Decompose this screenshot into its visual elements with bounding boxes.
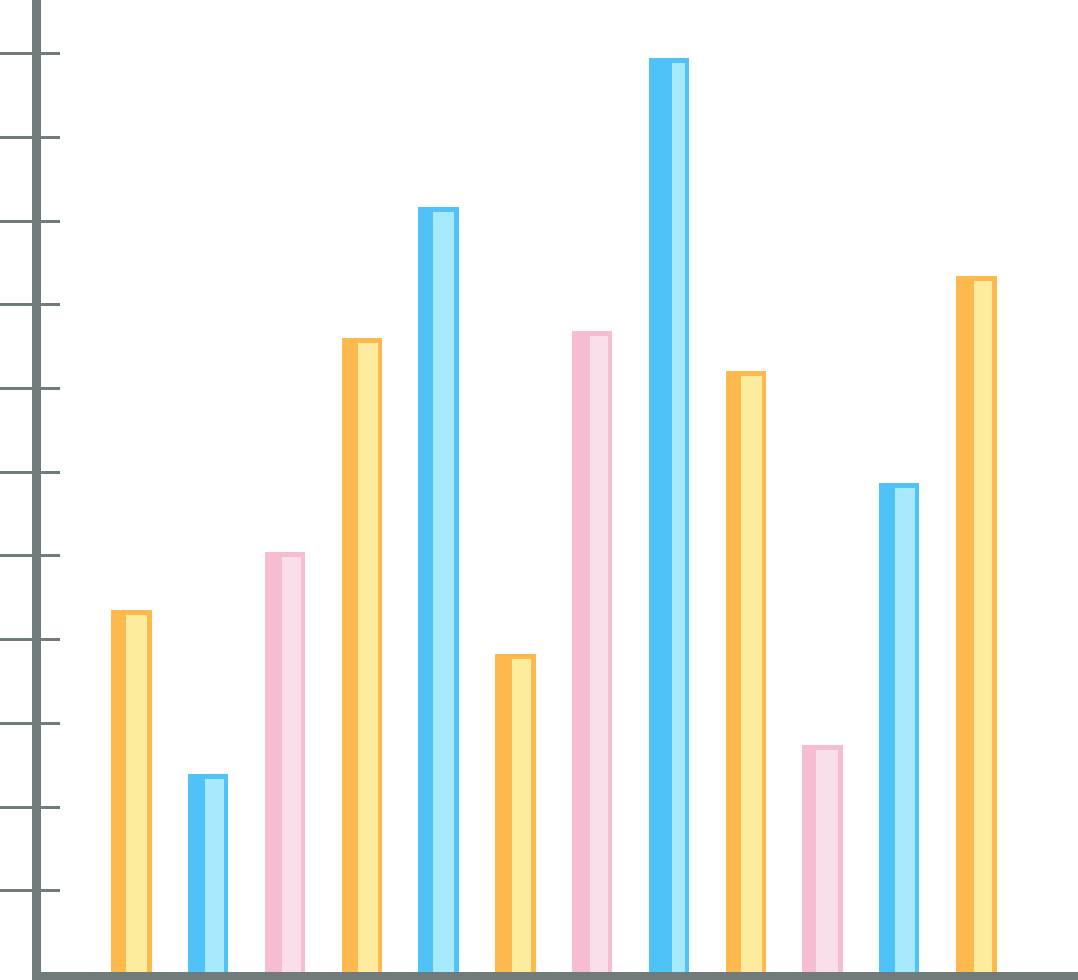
bar 7: pink — [572, 331, 612, 972]
y axis — [32, 0, 41, 980]
bar 2: blue — [188, 774, 228, 972]
bar 6: orange — [495, 654, 536, 972]
bar 4: orange — [342, 338, 382, 972]
bar 9: orange — [726, 371, 766, 972]
bar 1: orange — [111, 610, 152, 972]
bar 12: orange — [956, 276, 997, 972]
bar 10: pink — [802, 745, 843, 972]
bar 11: blue — [879, 483, 919, 972]
bar 8: blue — [649, 58, 689, 972]
y-axis tick marks — [0, 52, 60, 892]
bar 3: pink — [265, 552, 305, 972]
bar 5: blue — [418, 207, 459, 972]
x axis — [32, 972, 1078, 980]
